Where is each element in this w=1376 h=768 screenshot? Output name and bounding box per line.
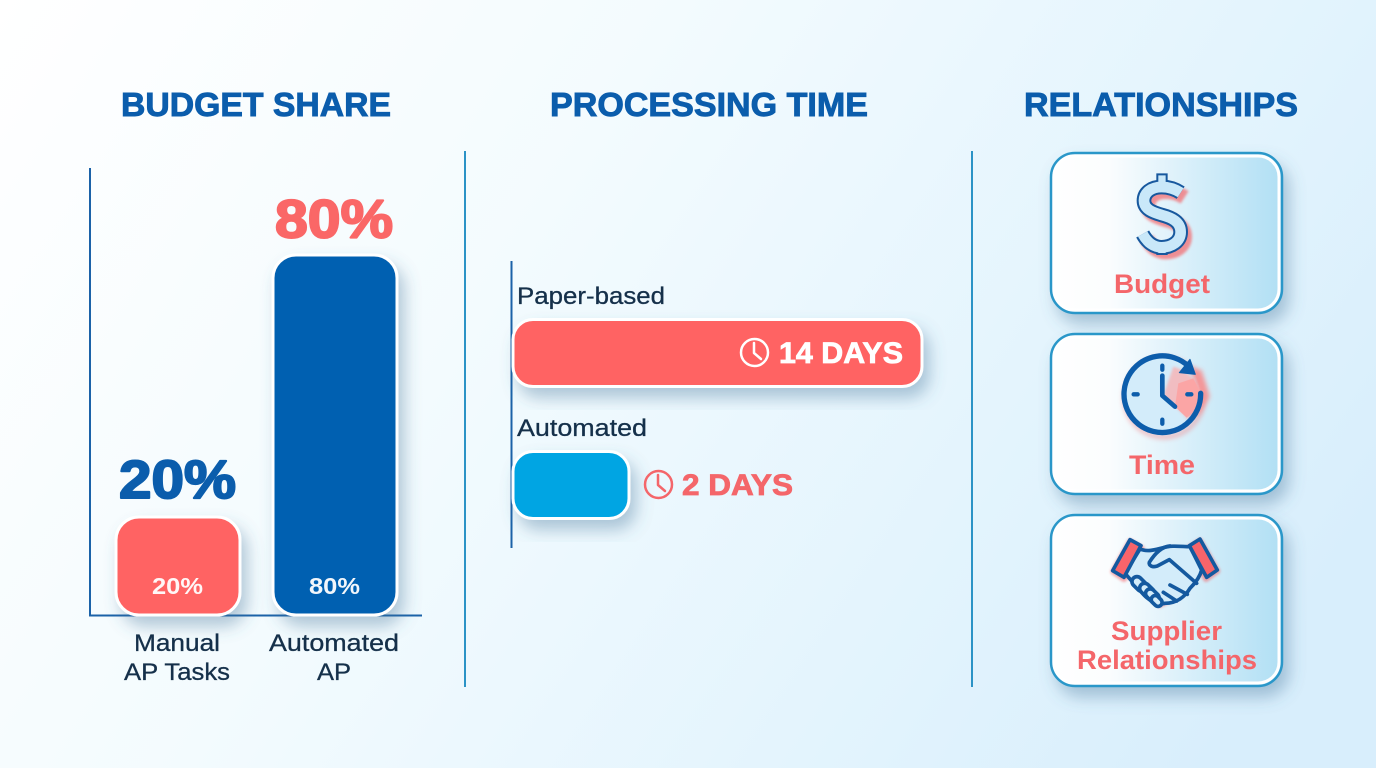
label: paper-based: Paper-based bbox=[517, 283, 665, 310]
label: supplier relationships: Supplier bbox=[1111, 616, 1223, 646]
icon: clock with arrow bbox=[1124, 356, 1210, 437]
icon: handshake bbox=[1113, 539, 1217, 608]
value: 20%: 20% bbox=[119, 450, 236, 510]
bar: automated 2 days bbox=[513, 452, 629, 518]
bar: automated AP bbox=[273, 255, 397, 615]
label: automated: Automated bbox=[517, 415, 647, 442]
label: supplier relationships: Relationships bbox=[1077, 645, 1257, 675]
bar: manual AP tasks: 20% bbox=[152, 573, 203, 599]
chart axis bbox=[510, 261, 512, 548]
icon: clock white bbox=[741, 339, 768, 366]
bar: manual AP tasks bbox=[116, 517, 240, 615]
label: budget: Budget bbox=[1114, 269, 1210, 299]
heading: processing time: PROCESSING TIME bbox=[550, 86, 868, 123]
bar: paper-based 14 days bbox=[513, 320, 922, 386]
label: manual AP tasks bbox=[124, 630, 230, 686]
bar: paper-based 14 days: 14 DAYS bbox=[779, 337, 903, 370]
panel: budget share bbox=[90, 86, 422, 686]
bar: automated AP: 80% bbox=[309, 573, 360, 599]
heading: budget share: BUDGET SHARE bbox=[121, 86, 391, 123]
label: automated AP: Automated bbox=[269, 630, 399, 657]
value: 80%: 80% bbox=[275, 190, 393, 250]
icon: clock red bbox=[645, 471, 672, 498]
chart axes bbox=[90, 168, 422, 616]
label: time: Time bbox=[1129, 450, 1195, 480]
card: time bbox=[1051, 334, 1282, 494]
label: manual AP tasks: AP Tasks bbox=[124, 659, 230, 686]
label: supplier relationships bbox=[1077, 616, 1257, 675]
label: manual AP tasks: Manual bbox=[134, 630, 220, 657]
label: automated AP bbox=[269, 630, 399, 686]
card: budget bbox=[1051, 153, 1282, 313]
panel: relationships bbox=[1024, 86, 1298, 686]
value: 2 days: 2 DAYS bbox=[682, 469, 793, 502]
icon: dollar bbox=[1143, 173, 1185, 255]
panel: processing time bbox=[512, 86, 922, 548]
label: automated AP: AP bbox=[317, 659, 351, 686]
card: supplier relationships bbox=[1051, 515, 1282, 686]
heading: relationships: RELATIONSHIPS bbox=[1024, 86, 1298, 123]
